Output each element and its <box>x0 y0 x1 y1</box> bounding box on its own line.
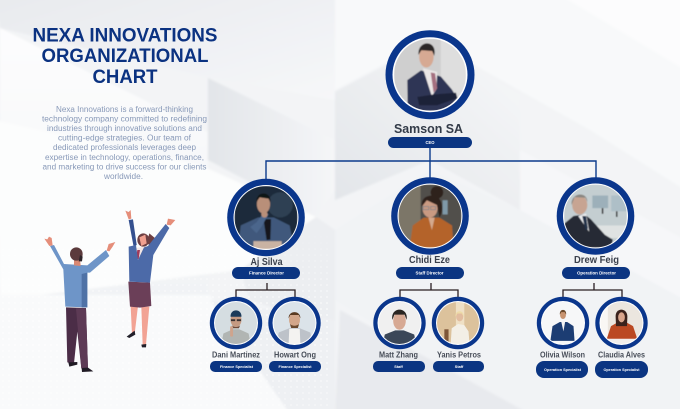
staff: Dani Martinez <box>210 297 262 372</box>
description text: industries through innovative solutions and <box>47 124 202 133</box>
role pill: Staff: Staff <box>455 365 464 369</box>
portrait: Dani Martinez <box>210 297 262 349</box>
role pill: Operation Specialist: Operation Specialist <box>544 368 582 372</box>
staff: Yanis Petros <box>432 297 484 372</box>
title: ORGANIZATIONAL <box>42 46 209 67</box>
name: Aj Silva: Aj Silva <box>250 257 283 268</box>
illustration: two cheering people <box>44 210 175 372</box>
name: Olivia Wilson: Olivia Wilson <box>540 350 585 360</box>
role pill: Staff Director: Staff Director <box>416 271 444 276</box>
connector lines: CEO to directors <box>266 148 596 179</box>
description text: expertise in technology, operations, finance, <box>45 153 204 162</box>
role pill: Finance Specialist: Finance Specialist <box>220 365 254 369</box>
portrait: Claudia Alves <box>595 297 648 349</box>
description text: technology company committed to redefining <box>42 114 207 124</box>
title <box>32 26 218 88</box>
portrait: Samson SA <box>386 30 474 119</box>
director: Aj Silva <box>227 179 305 279</box>
director: Chidi Eze <box>391 177 469 279</box>
description text: worldwide. <box>103 172 143 181</box>
connector lines: directors to staff <box>236 283 622 297</box>
portrait: Chidi Eze <box>391 177 469 255</box>
description text: and marketing to drive success for our clients <box>42 162 206 172</box>
role pill: Staff: Staff <box>394 365 403 369</box>
name: Drew Feig: Drew Feig <box>574 255 619 266</box>
staff: Matt Zhang <box>373 297 426 372</box>
title: NEXA INNOVATIONS <box>32 26 218 46</box>
portrait: Drew Feig <box>557 177 634 255</box>
description text <box>42 105 207 181</box>
name: Dani Martinez: Dani Martinez <box>212 350 260 360</box>
role pill: Finance Director: Finance Director <box>249 271 284 276</box>
portrait: Yanis Petros <box>432 297 484 349</box>
staff: Claudia Alves <box>595 297 648 378</box>
role pill: Finance Specialist: Finance Specialist <box>278 365 312 369</box>
staff: Howart Ong <box>268 297 321 372</box>
description text: dedicated professionals leverages deep <box>53 143 197 152</box>
staff: Olivia Wilson <box>536 297 589 378</box>
portrait: Howart Ong <box>268 297 321 349</box>
description text: Nexa Innovations is a forward-thinking <box>56 105 193 114</box>
role pill: Operation Director: Operation Director <box>577 271 616 276</box>
portrait: Aj Silva <box>227 179 305 256</box>
name: Chidi Eze: Chidi Eze <box>409 255 450 266</box>
name: Samson SA: Samson SA <box>394 121 464 136</box>
title: CHART <box>92 67 158 88</box>
role pill: CEO: CEO <box>425 140 435 145</box>
director: Drew Feig <box>557 177 634 279</box>
name: Howart Ong: Howart Ong <box>274 350 316 360</box>
role pill: Operation Specialist: Operation Specialist <box>604 368 640 372</box>
name: Yanis Petros: Yanis Petros <box>437 350 481 360</box>
name: Claudia Alves: Claudia Alves <box>598 350 645 360</box>
CEO: Samson SA <box>386 30 474 148</box>
name: Matt Zhang: Matt Zhang <box>379 350 418 360</box>
description text: cutting-edge strategies. Our team of <box>58 134 192 142</box>
portrait: Matt Zhang <box>373 297 426 349</box>
portrait: Olivia Wilson <box>537 297 589 349</box>
background dot texture <box>260 303 328 340</box>
woman <box>125 210 175 347</box>
man <box>44 237 115 372</box>
